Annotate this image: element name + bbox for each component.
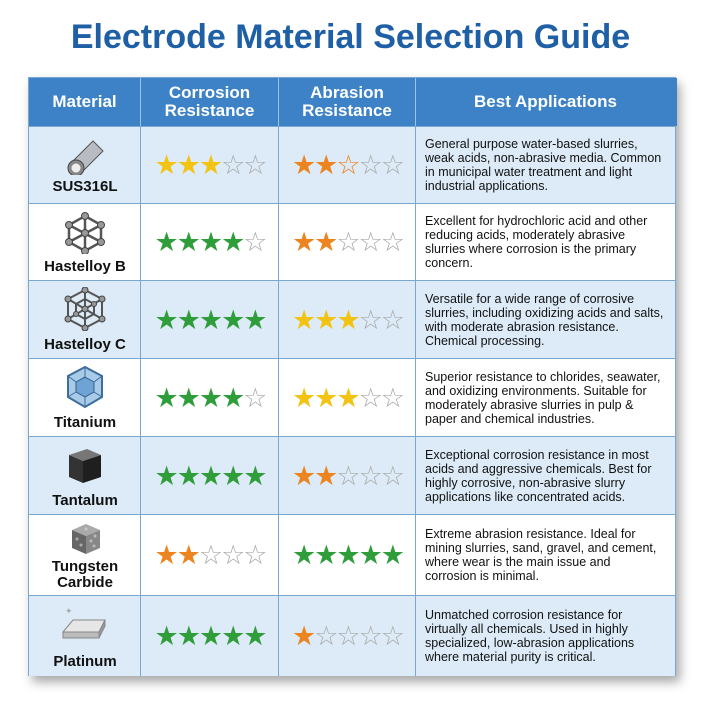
row: SUS316L: SUS316L [52,178,118,195]
row: Tungsten Carbide: Carbide [57,574,113,591]
row: Hastelloy B: ☆☆☆ [336,227,403,257]
row: SUS316L: ★★☆ [292,150,359,180]
row: Tungsten Carbide: ★★ [154,540,199,570]
row: Hastelloy C [29,280,675,358]
icon: dark cube [69,449,101,483]
row: Hastelloy C: Hastelloy C [44,336,126,353]
icon: complex lattice [64,287,106,331]
header row: Corrosion [169,83,250,102]
row: Titanium: Superior resistance to chlorides, seawater, and oxidizing environments. Suitable for moderately abrasive slurries in pulp & paper and chemical industries. [425,370,661,426]
row: Tantalum: ★★★★★ [154,460,266,490]
header row: Resistance [302,101,392,120]
row: Hastelloy B: Excellent for hydrochloric acid and other reducing acids, moderately abrasive slurries where corrosion is the primary concern. [425,214,647,270]
row: Platinum [29,595,675,676]
row: Hastelloy C: Versatile for a wide range of corrosive slurries, including oxidizing acids and salts, with moderate abrasion resistance. Chemical processing. [425,292,663,348]
table [28,77,676,676]
title: Electrode Material Selection Guide [71,18,630,56]
header row: Abrasion [310,83,384,102]
row: Titanium: ☆☆ [359,382,403,412]
icon: grainy cube [72,524,100,554]
row: Platinum: ★ [292,621,314,651]
row: Tungsten Carbide: Extreme abrasion resistance. Ideal for mining slurries, sand, gravel, and cement, where wear is the main issue and corrosion is minimal. [425,527,656,583]
row: Tungsten Carbide: ☆☆☆ [199,540,266,570]
row: Titanium: ★★★ [292,382,359,412]
header row: Best Applications [474,92,617,111]
icon: ingot [62,606,106,638]
row: SUS316L: ☆☆ [359,150,403,180]
row: Tungsten Carbide: ★★★★★ [292,540,403,570]
row: Hastelloy B: Hastelloy B [44,258,126,275]
row: Tantalum: ☆☆☆ [336,460,403,490]
row: Platinum: Unmatched corrosion resistance for virtually all chemicals. Used in highly specialized, low-abrasion applications where material purity is critical. [425,608,634,664]
header row: Resistance [165,101,254,120]
row: Hastelloy B: ☆ [243,227,266,257]
row: SUS316L [29,126,675,203]
row: Hastelloy C: ★★★★★ [154,304,266,334]
row: Hastelloy C: ☆☆ [359,304,403,334]
row: Titanium: Titanium [54,414,116,431]
row: Platinum: ☆☆☆☆ [314,621,403,651]
row: Tungsten Carbide [29,514,675,595]
row: Titanium: ★★★★ [154,382,243,412]
row: Tantalum: Tantalum [52,492,118,509]
row: SUS316L: ☆☆ [221,150,266,180]
icon: ingot: ✦ [65,606,73,616]
row: Hastelloy C: ★★★ [292,304,359,334]
row: Hastelloy B: ★★★★ [154,227,243,257]
row: Tantalum: Exceptional corrosion resistance in most acids and aggressive chemicals. Best for highly corrosive, non-abrasive slurry applications like concentrated acids. [425,448,652,504]
row: Platinum: ★★★★★ [154,621,266,651]
header row [29,78,677,126]
icon: pipe [68,140,104,175]
icon: blue cube [67,366,103,408]
row: Platinum: Platinum [53,653,117,670]
row: Tungsten Carbide: Tungsten [52,558,118,575]
row: SUS316L: General purpose water-based slurries, weak acids, non-abrasive media. Common in municipal water treatment and light industrial applications. [425,137,661,193]
header row: Material [52,92,117,111]
row: Hastelloy B: ★★ [292,227,336,257]
row: Tantalum [29,436,675,514]
row: Titanium: ☆ [243,382,266,412]
row: Titanium [29,358,675,436]
row: Tantalum: ★★ [292,460,336,490]
row: Hastelloy B [29,203,675,280]
row: SUS316L: ★★★ [154,150,221,180]
icon: lattice [65,212,105,254]
